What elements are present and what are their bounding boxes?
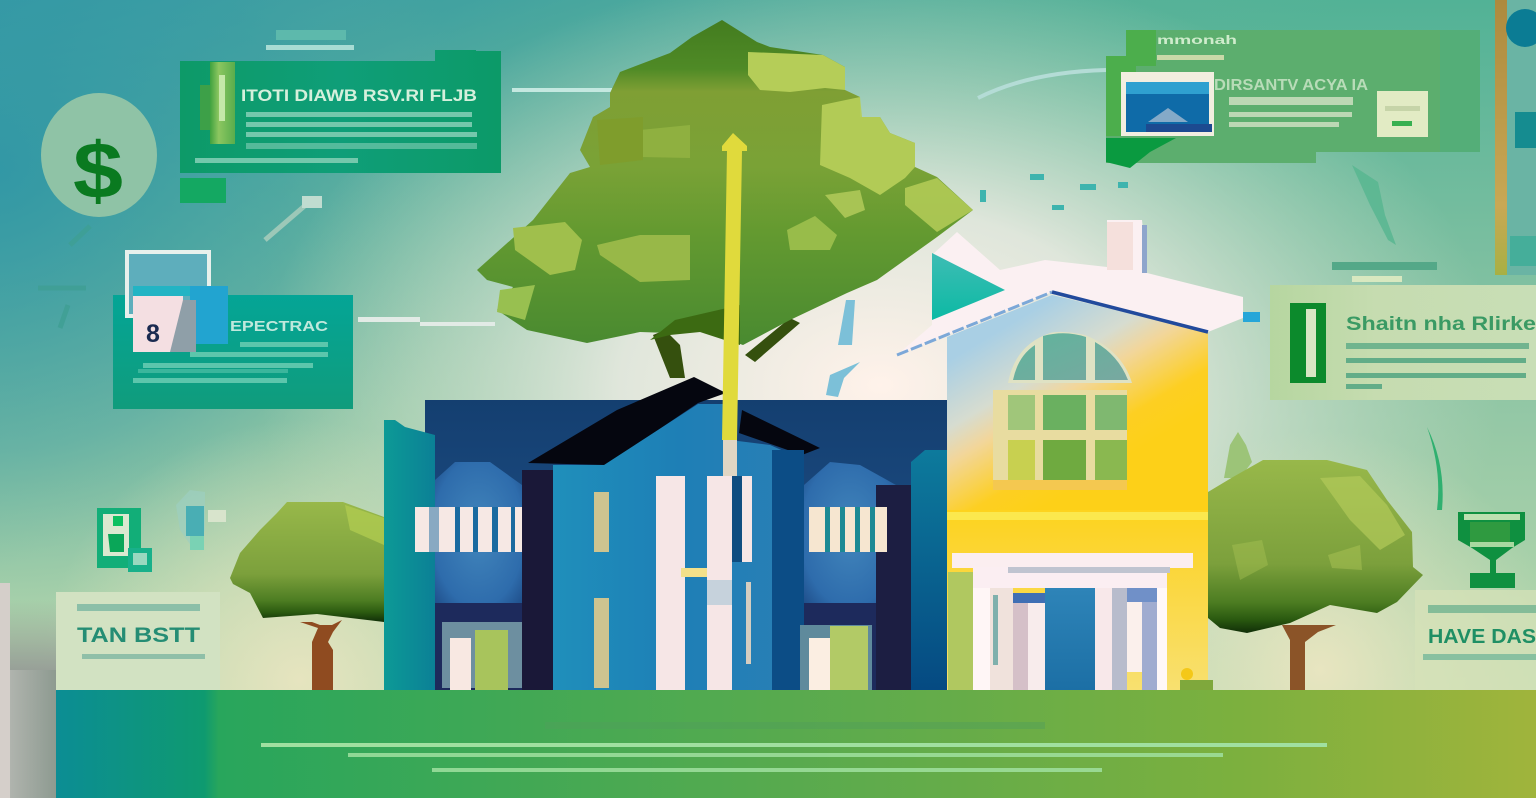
caption above top left panel bbox=[266, 30, 354, 50]
white roof bbox=[897, 220, 1243, 355]
panel: top right bbox=[1106, 30, 1480, 168]
dollar sign: $ bbox=[73, 126, 123, 215]
left windows bbox=[415, 507, 522, 552]
icon: document window bbox=[127, 252, 228, 352]
right windows bbox=[809, 507, 887, 552]
icon: green bookmark bbox=[1290, 303, 1326, 383]
left grey strip bbox=[0, 583, 56, 798]
panel heading: Shaitn nha Rlirke bbox=[1346, 314, 1536, 335]
arrow: connector top left bbox=[512, 88, 612, 92]
arrow: connector top right bbox=[978, 70, 1106, 98]
card: bottom right bbox=[1415, 590, 1536, 690]
porch bbox=[948, 553, 1193, 690]
panel: right middle bbox=[1270, 285, 1536, 400]
icon: green bookmark bbox=[200, 62, 235, 144]
arrow: top right panel to side panel bbox=[1352, 165, 1396, 245]
icon: picture frame bbox=[1121, 72, 1214, 136]
ground band with caption bbox=[56, 690, 1536, 798]
trunk bbox=[300, 620, 342, 690]
arched window bbox=[993, 332, 1132, 490]
left lower door bbox=[442, 622, 522, 690]
flowers at house base bbox=[1180, 668, 1213, 690]
right tower bbox=[911, 450, 947, 690]
icon: dollar coin bbox=[41, 93, 157, 217]
small icon: light bulb bbox=[176, 490, 226, 550]
main tree bbox=[477, 20, 973, 378]
card value: TAN BSTT bbox=[77, 624, 200, 647]
panel body lines bbox=[1229, 97, 1353, 127]
arrow: diagonal up right bbox=[265, 196, 322, 240]
panel heading: EPECTRAC bbox=[230, 318, 328, 335]
upper facade bbox=[425, 400, 947, 690]
yellow pole with arrow bbox=[722, 133, 747, 476]
blue building bbox=[384, 377, 947, 690]
yellow house bbox=[897, 220, 1260, 690]
icon: document window: 8 bbox=[146, 320, 160, 348]
canopy highlight bbox=[345, 505, 384, 545]
canopy bbox=[477, 20, 973, 345]
arrow: dollar to left panel bbox=[38, 226, 90, 328]
central gable bbox=[553, 404, 804, 690]
black roof bbox=[528, 377, 820, 465]
canopy dark underside bbox=[650, 305, 740, 345]
plant sprig bbox=[1224, 432, 1252, 478]
arrow: right side downward bbox=[1427, 427, 1443, 510]
right lower door bbox=[800, 625, 872, 690]
canopy bbox=[1208, 460, 1423, 633]
dark recess bbox=[522, 470, 553, 690]
left tower bbox=[384, 420, 435, 690]
panel body lines bbox=[133, 342, 328, 383]
canopy highlights bbox=[497, 52, 973, 320]
teal gable triangle bbox=[932, 253, 1005, 320]
right edge bar and circles bbox=[1495, 0, 1536, 275]
small tree right bbox=[1208, 432, 1423, 690]
blue arrows beside house bbox=[826, 300, 860, 397]
tall yellow windows bbox=[594, 492, 609, 688]
wall bbox=[947, 295, 1208, 512]
canopy bbox=[230, 502, 384, 622]
card value: HAVE DAS bbox=[1428, 626, 1536, 648]
small icon: green document bbox=[97, 508, 152, 572]
trunk branches bbox=[653, 318, 800, 378]
caption text lines bbox=[261, 743, 1327, 772]
trunk bbox=[1282, 625, 1336, 690]
right wing bbox=[804, 462, 896, 603]
panel heading: DIRSANTV ACYA IA bbox=[1214, 77, 1368, 94]
arrow: connector mid left bbox=[358, 317, 495, 326]
panel body lines bbox=[195, 112, 477, 163]
panel heading: ITOTI DIAWB RSV.RI FLJB bbox=[241, 86, 477, 105]
small confetti marks bbox=[980, 174, 1128, 210]
left wing bbox=[435, 462, 522, 603]
panel: mid left bbox=[113, 252, 353, 409]
card: bottom left bbox=[56, 592, 220, 690]
panel body lines bbox=[1346, 343, 1529, 389]
caption above right panel bbox=[1332, 262, 1437, 282]
icon: note card bbox=[1377, 91, 1428, 137]
panel: top left bbox=[180, 50, 501, 203]
canopy highlights bbox=[1232, 476, 1405, 580]
roof line bbox=[897, 292, 1052, 355]
panel title: mmonah bbox=[1157, 33, 1237, 47]
white columns bbox=[656, 476, 752, 690]
small tree left bbox=[230, 502, 384, 690]
icon: trophy cup bbox=[1458, 512, 1525, 588]
